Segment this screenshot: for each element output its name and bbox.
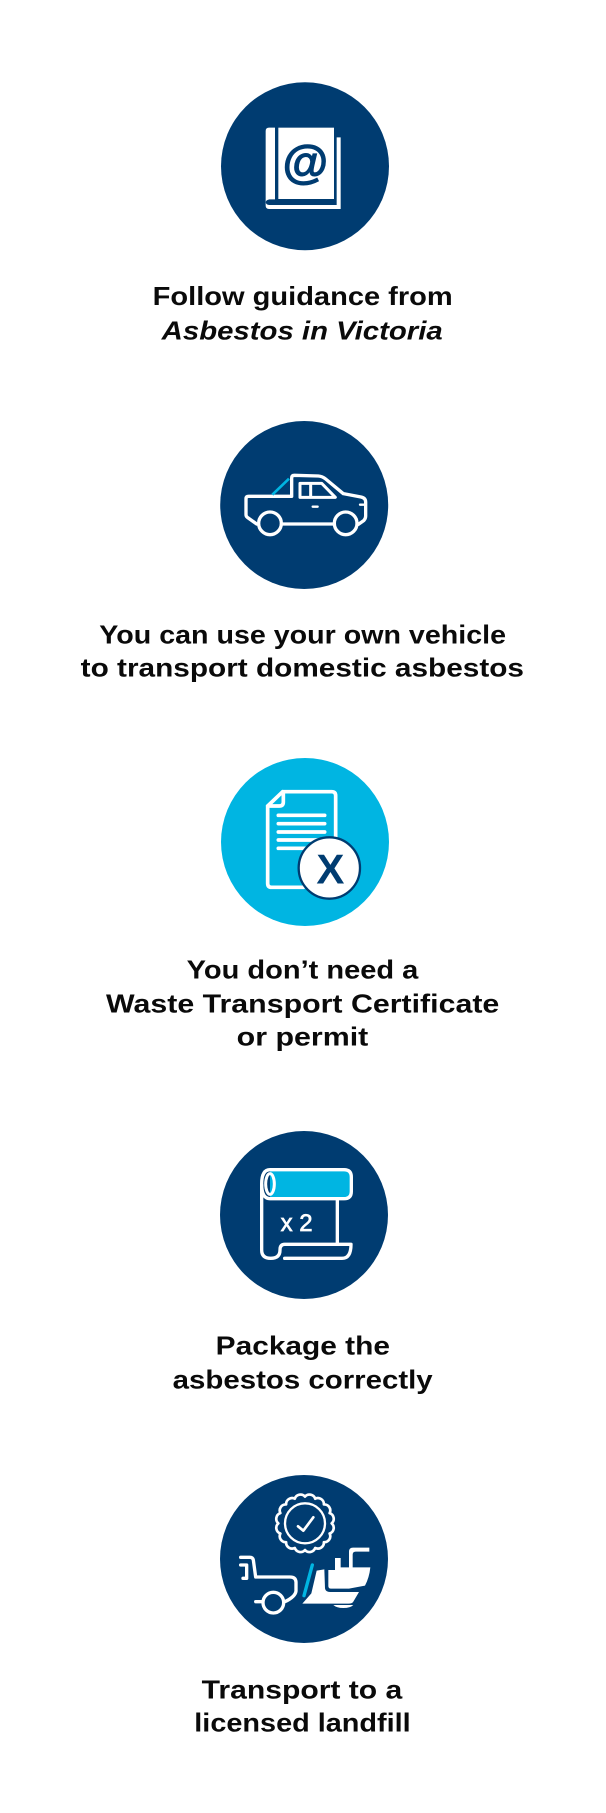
icon: document with cross: X (316, 845, 344, 892)
heading: licensed landfill (194, 1674, 411, 1738)
icon: badge, ute and bulldozer (220, 1475, 388, 1643)
heading: follow guidance: Follow guidance from (153, 281, 453, 311)
panel: no certificate (106, 758, 499, 1052)
heading: package correctly: Package the (216, 1330, 390, 1360)
panel: own vehicle (81, 421, 524, 683)
heading: licensed landfill: Transport to a (202, 1674, 403, 1704)
heading: licensed landfill: licensed landfill (194, 1708, 411, 1738)
icon: divider slash (304, 1565, 312, 1596)
heading: no certificate: or permit (237, 1022, 369, 1052)
icon: plastic roll times two: x 2 (281, 1210, 313, 1237)
panel: package correctly (173, 1131, 433, 1394)
heading: no certificate (106, 954, 499, 1052)
heading: follow guidance: Asbestos in Victoria (161, 315, 443, 345)
icon: plastic roll times two (220, 1131, 388, 1299)
icon: ute rear (241, 1557, 296, 1613)
heading: no certificate: Waste Transport Certificate (106, 988, 499, 1018)
heading: follow guidance (153, 281, 453, 345)
heading: package correctly (173, 1330, 433, 1394)
icon: document with cross (221, 758, 389, 926)
panel: follow guidance (153, 82, 453, 345)
heading: own vehicle: to transport domestic asbestos (81, 653, 524, 683)
heading: own vehicle: You can use your own vehicle (99, 619, 506, 649)
icon: book with at sign: @ (283, 135, 328, 187)
heading: no certificate: You don’t need a (187, 954, 419, 984)
icon: approval badge (276, 1495, 334, 1552)
heading: own vehicle (81, 619, 524, 683)
icon: pickup truck (220, 421, 388, 589)
panel: licensed landfill (194, 1475, 411, 1738)
icon: bulldozer (302, 1548, 370, 1608)
icon: book with at sign (221, 82, 389, 250)
heading: package correctly: asbestos correctly (173, 1364, 433, 1394)
